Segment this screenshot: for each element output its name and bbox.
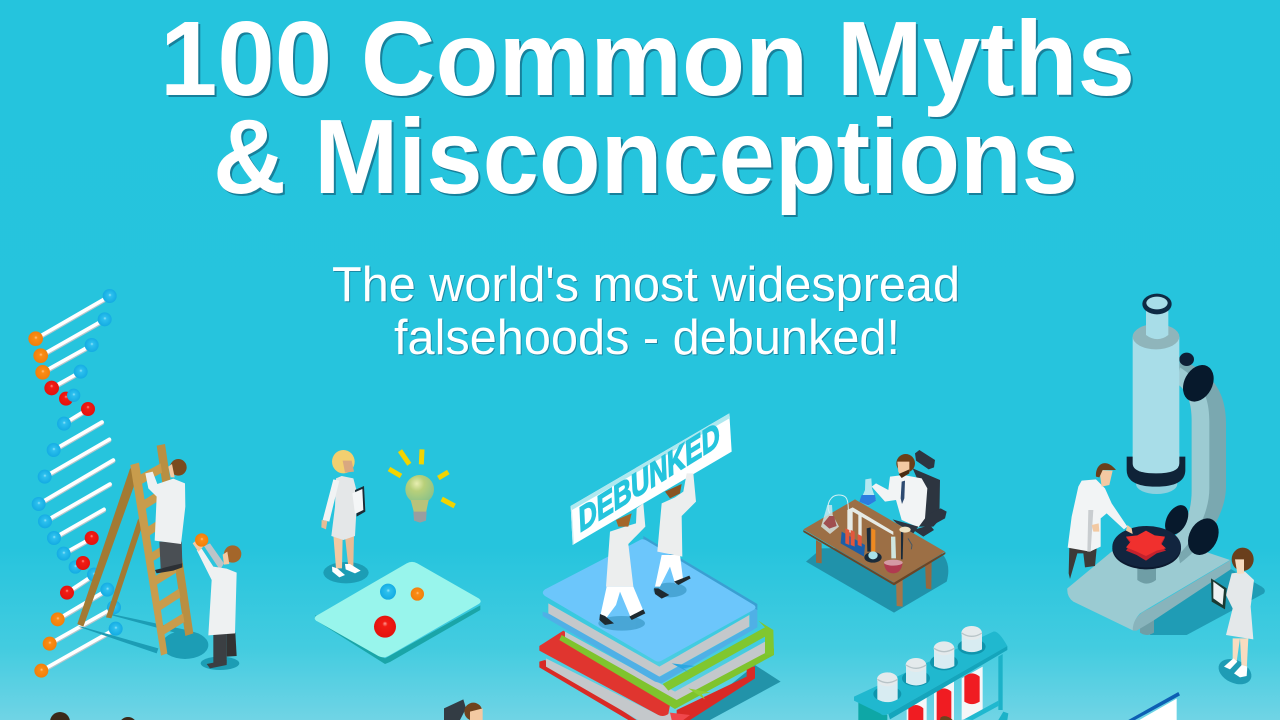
collar and lens <box>1136 474 1177 494</box>
test tube rack <box>854 626 1008 720</box>
bookmarks <box>672 663 695 673</box>
shadow under woman <box>323 562 369 583</box>
knobs <box>1177 360 1220 407</box>
blue book <box>543 536 757 683</box>
female scientist with clipboard <box>1211 548 1255 689</box>
board with spheres <box>315 562 481 664</box>
DNA helix with ladder scientists <box>28 289 241 678</box>
microscope <box>1067 294 1231 635</box>
woman, bulb and board group <box>315 413 781 720</box>
debunked sign: DEBUNKED <box>575 416 723 539</box>
woman with clipboard <box>321 450 365 577</box>
scientist heads at bottom edge <box>50 712 137 720</box>
title <box>160 0 1135 216</box>
title: & Misconceptions <box>213 98 1078 216</box>
scientist at lab desk <box>803 450 1008 720</box>
desk <box>803 499 945 607</box>
stack of books <box>539 536 781 720</box>
male scientist at microscope <box>1068 463 1133 579</box>
right sign carrier <box>654 473 696 599</box>
base <box>1140 618 1154 635</box>
office chair <box>913 450 947 537</box>
red test tubes <box>907 667 983 720</box>
light bulb <box>389 449 455 523</box>
subtitle <box>332 258 960 365</box>
subtitle: falsehoods - debunked! <box>394 311 900 365</box>
giant microscope group <box>1067 294 1265 720</box>
arm <box>1175 360 1226 563</box>
desk shadow <box>806 547 948 613</box>
specimen star <box>1126 532 1166 561</box>
tube <box>1133 337 1179 464</box>
wooden ladder <box>77 444 193 656</box>
rear knob upper <box>1179 353 1194 366</box>
sign shadow on book and feet <box>598 583 687 631</box>
book shadow <box>687 665 781 720</box>
chemistry apparatus <box>821 495 912 573</box>
blue flask <box>859 478 876 506</box>
subtitle: The world's most widespread <box>332 258 960 312</box>
left sign carrier <box>599 503 645 625</box>
seated scientist <box>872 454 927 533</box>
ladder shadow <box>78 614 208 659</box>
chart board at bottom edge <box>1128 692 1180 720</box>
scientist on ladder <box>145 459 187 573</box>
stage <box>1137 563 1156 584</box>
eyepiece <box>1142 294 1172 314</box>
microscope shadow <box>1150 567 1265 635</box>
scientist head at bottom edge <box>444 699 483 720</box>
DNA helix <box>28 289 123 678</box>
green book <box>559 621 774 709</box>
title: 100 Common Myths <box>160 0 1135 118</box>
scientist holding ball <box>193 533 241 670</box>
red book <box>539 631 755 720</box>
